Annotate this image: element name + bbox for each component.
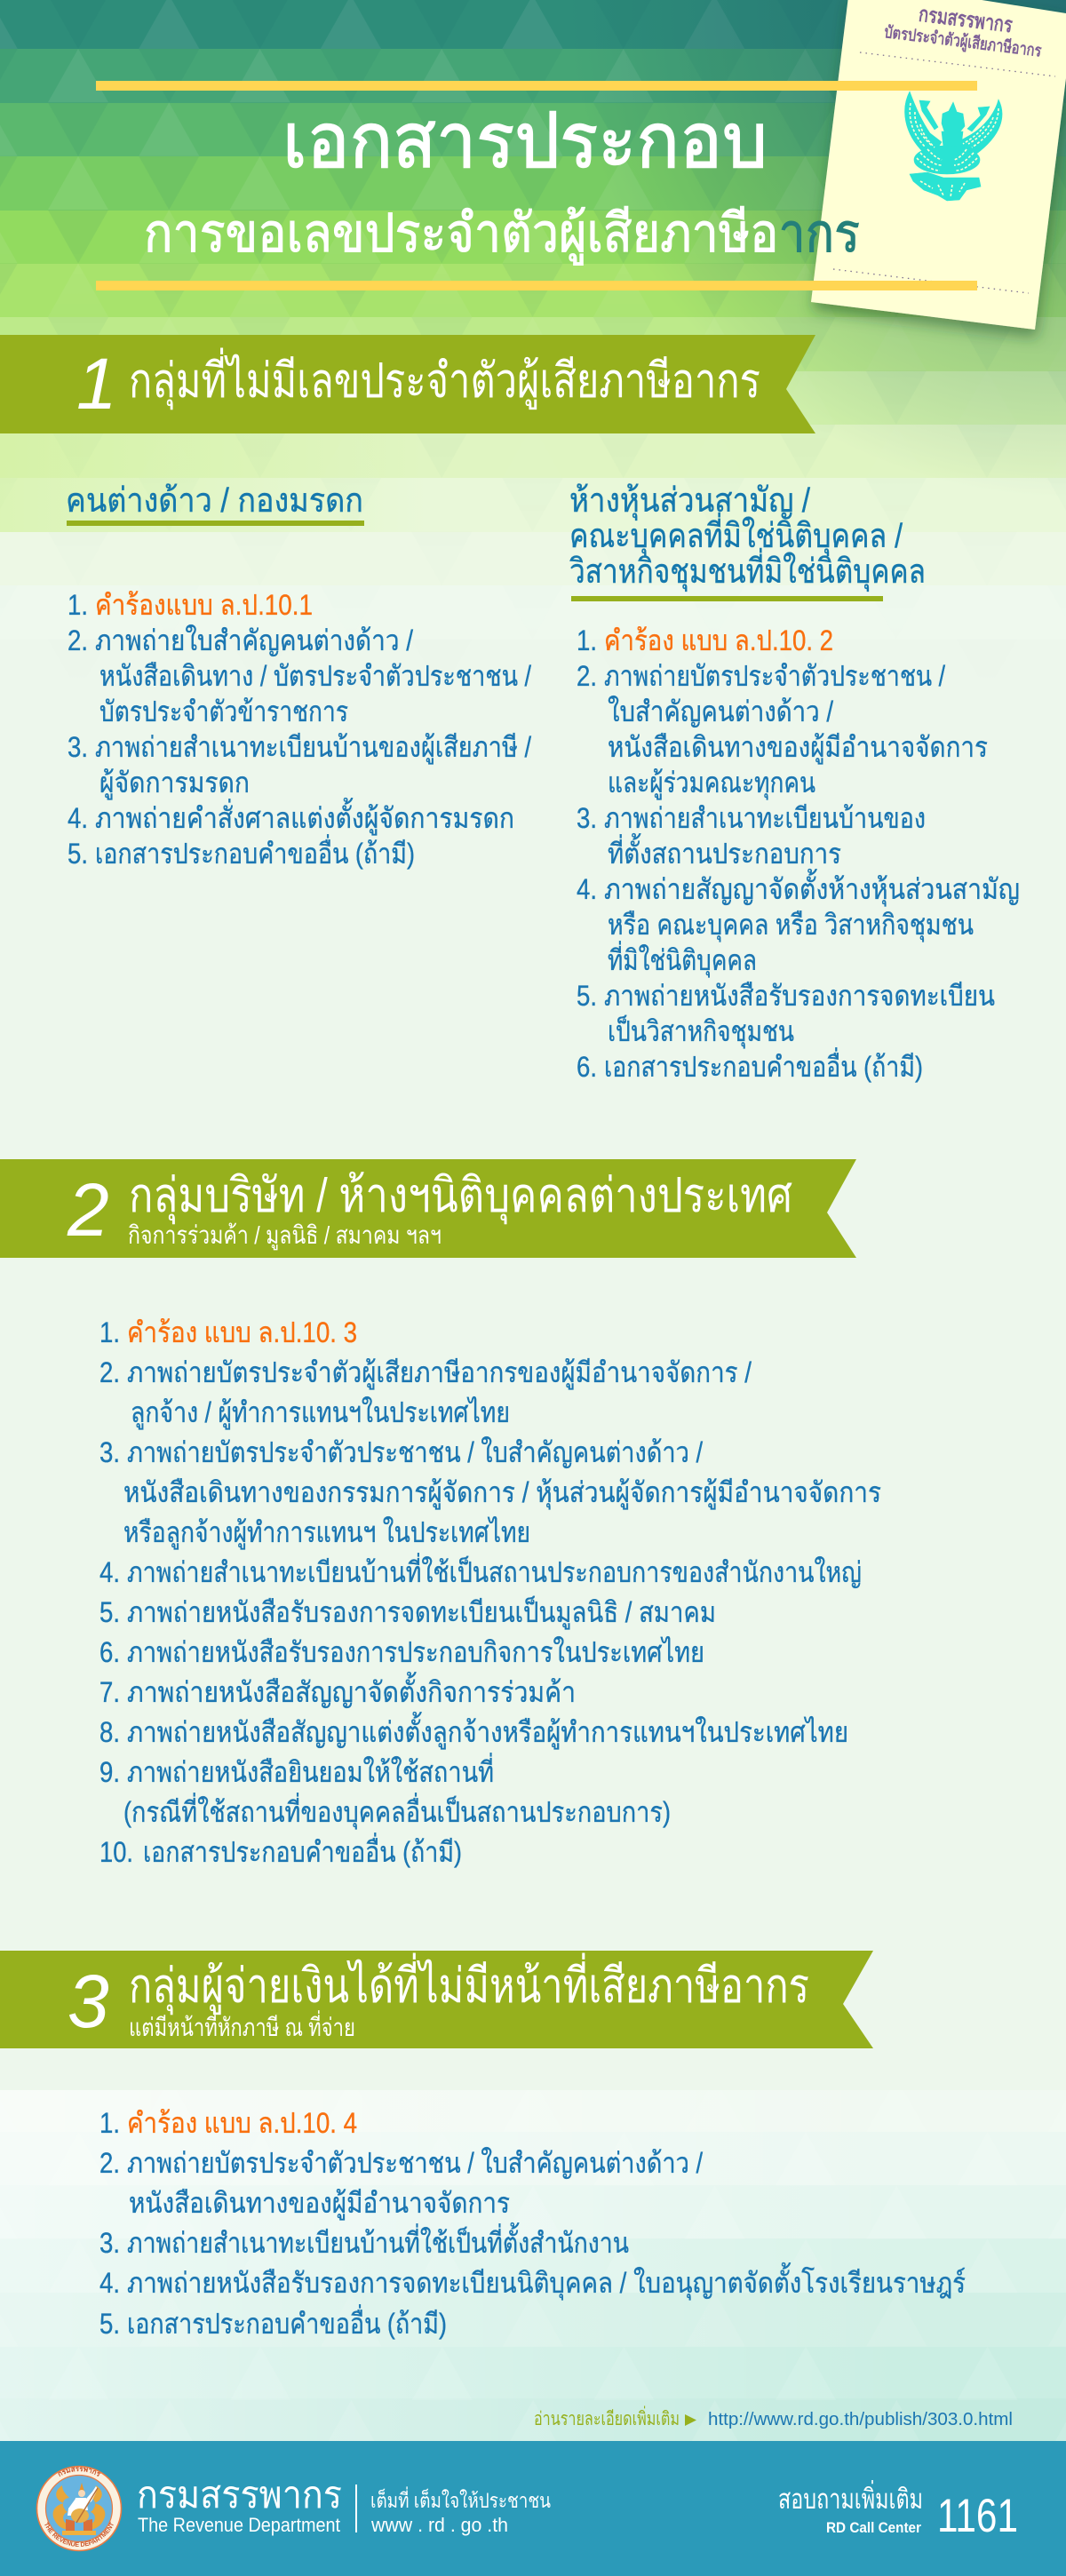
- panel: section 2 document list: ลูกจ้าง / ผู้ทำการแทนฯในประเทศไทย: [131, 1396, 510, 1430]
- document list: 4.: [68, 802, 88, 834]
- panel: section 2 document list: ภาพถ่ายบัตรประจำตัวประชาชน / ใบสำคัญคนต่างด้าว /: [127, 1436, 703, 1468]
- panel: section 2 document list: 2.: [99, 1356, 120, 1388]
- panel: section 3 document list: 4.: [99, 2267, 120, 2299]
- heading: [569, 482, 926, 601]
- panel: section 2 document list: เอกสารประกอบคำขออื่น (ถ้ามี): [143, 1833, 462, 1868]
- heading: ห้างหุ้นส่วนสามัญ /: [569, 482, 810, 521]
- ribbon: section 1: กลุ่มที่ไม่มีเลขประจำตัวผู้เสียภาษีอากร: [129, 347, 760, 410]
- document list: หนังสือเดินทาง / บัตรประจำตัวประชาชน /: [99, 660, 531, 692]
- panel: section 2 document list: 3.: [99, 1436, 120, 1468]
- panel: section 2 document list: ภาพถ่ายหนังสือยินยอมให้ใช้สถานที่: [127, 1753, 494, 1788]
- document list: และผู้ร่วมคณะทุกคน: [608, 767, 815, 800]
- document list: 5.: [577, 980, 597, 1012]
- panel: section 2 document list: หนังสือเดินทางของกรรมการผู้จัดการ / หุ้นส่วนผู้จัดการผู้มีอำนาจจัดการ: [123, 1476, 881, 1510]
- call center: RD Call Center: [826, 2519, 921, 2536]
- panel: section 2 document list: 5.: [99, 1596, 120, 1628]
- ribbon: section 3: แต่มีหน้าที่หักภาษี ณ ที่จ่าย: [129, 2010, 355, 2041]
- panel: foreigners and estates: [66, 482, 531, 870]
- document list: หนังสือเดินทางของผู้มีอำนาจจัดการ: [608, 731, 988, 765]
- panel: section 3 document list: 3.: [99, 2227, 120, 2259]
- slogan and website: [370, 2486, 551, 2536]
- card heading: กรมสรรพากร: [918, 4, 1014, 37]
- slogan and website: เต็มที่ เต็มใจให้ประชาชน: [370, 2486, 551, 2512]
- document list: เป็นวิสาหกิจชุมชน: [608, 1014, 794, 1049]
- icon: revenue department seal: กรมสรรพากร: [59, 2467, 101, 2477]
- ribbon: section 1: [0, 335, 815, 433]
- document list: 1.: [577, 624, 597, 656]
- panel: section 3 document list: 5.: [99, 2308, 120, 2340]
- panel: section 2 document list: ภาพถ่ายหนังสือรับรองการจดทะเบียนเป็นมูลนิธิ / สมาคม: [127, 1595, 716, 1630]
- read more link: http://www.rd.go.th/publish/303.0.html: [708, 2410, 1013, 2429]
- document list: [68, 589, 531, 870]
- panel: section 3 document list: ภาพถ่ายสำเนาทะเบียนบ้านที่ใช้เป็นที่ตั้งสำนักงาน: [127, 2222, 629, 2259]
- title: [96, 81, 977, 290]
- call center: 1161: [937, 2490, 1018, 2542]
- heading: วิสาหกิจชุมชนที่มิใช่นิติบุคคล: [569, 548, 926, 592]
- document list: เอกสารประกอบคำขออื่น (ถ้ามี): [604, 1047, 923, 1083]
- subheading: การขอเลขประจำตัวผู้เสียภาษีอากร: [144, 203, 860, 266]
- document list: ภาพถ่ายใบสำคัญคนต่างด้าว /: [95, 624, 413, 656]
- ribbon: section 1: 1: [76, 344, 117, 425]
- panel: section 3 document list: 1.: [99, 2107, 120, 2139]
- document list: ภาพถ่ายหนังสือรับรองการจดทะเบียน: [604, 980, 995, 1012]
- main heading: เอกสารประกอบ: [282, 99, 768, 184]
- panel: section 2 document list: ภาพถ่ายหนังสือรับรองการประกอบกิจการในประเทศไทย: [127, 1636, 704, 1668]
- ribbon: section 3: 3: [68, 1960, 109, 2043]
- panel: section 2 document list: 8.: [99, 1716, 120, 1748]
- panel: section 2 document list: (กรณีที่ใช้สถานที่ของบุคคลอื่นเป็นสถานประกอบการ): [123, 1793, 671, 1830]
- icon: garuda emblem: [905, 91, 1002, 201]
- icon: revenue department seal: THE REVENUE DEPARTMENT: [44, 2522, 114, 2547]
- panel: section 2 document list: ภาพถ่ายหนังสือสัญญาจัดตั้งกิจการร่วมค้า: [127, 1672, 576, 1708]
- document list: 5.: [68, 838, 88, 870]
- panel: section 2 document list: ภาพถ่ายบัตรประจำตัวผู้เสียภาษีอากรของผู้มีอำนาจจัดการ /: [127, 1356, 752, 1390]
- organisation name: [137, 2474, 342, 2536]
- document list: ผู้จัดการมรดก: [99, 767, 250, 800]
- document list: ใบสำคัญคนต่างด้าว /: [608, 696, 833, 727]
- document list: คำร้อง แบบ ล.ป.10. 2: [604, 624, 833, 656]
- document list: หรือ คณะบุคคล หรือ วิสาหกิจชุมชน: [608, 909, 974, 942]
- card heading: [883, 0, 1046, 62]
- document list: ภาพถ่ายสัญญาจัดตั้งห้างหุ้นส่วนสามัญ: [604, 869, 1020, 907]
- read more link: อ่านรายละเอียดเพิ่มเติม: [534, 2405, 680, 2429]
- panel: section 2 document list: 6.: [99, 1636, 120, 1668]
- document list: บัตรประจำตัวข้าราชการ: [99, 696, 348, 727]
- document list: ที่ตั้งสถานประกอบการ: [608, 833, 841, 870]
- ribbon: section 2: กิจการร่วมค้า / มูลนิธิ / สมาคม ฯลฯ: [128, 1221, 442, 1251]
- heading: คณะบุคคลที่มิใช่นิติบุคคล /: [569, 513, 903, 556]
- ribbon: section 3: กลุ่มผู้จ่ายเงินได้ที่ไม่มีหน้าที่เสียภาษีอากร: [129, 1952, 809, 2015]
- ribbon: section 3: [0, 1951, 873, 2048]
- panel: section 3 document list: คำร้อง แบบ ล.ป.10. 4: [127, 2107, 357, 2139]
- document list: 2.: [577, 660, 597, 692]
- panel: section 3 document list: หนังสือเดินทางของผู้มีอำนาจจัดการ: [129, 2187, 510, 2221]
- panel: section 2 document list: 4.: [99, 1556, 120, 1588]
- panel: section 3 document list: 2.: [99, 2147, 120, 2179]
- organisation name: กรมสรรพากร: [137, 2474, 342, 2516]
- call center: [778, 2480, 1018, 2542]
- document list: ภาพถ่ายสำเนาทะเบียนบ้านของ: [604, 802, 926, 834]
- organisation name: The Revenue Department: [138, 2514, 340, 2536]
- panel: section 2 document list: 9.: [99, 1756, 120, 1788]
- document list: คำร้องแบบ ล.ป.10.1: [95, 589, 313, 621]
- document card: [811, 0, 1066, 330]
- panel: section 2 document list: ภาพถ่ายหนังสือสัญญาแต่งตั้งลูกจ้างหรือผู้ทำการแทนฯในประเทศไทย: [127, 1712, 848, 1750]
- document list: 2.: [68, 624, 88, 656]
- ribbon: section 2: กลุ่มบริษัท / ห้างฯนิติบุคคลต่างประเทศ: [129, 1169, 792, 1225]
- panel: partnerships and community enterprises: [569, 482, 1020, 1083]
- call center: สอบถามเพิ่มเติม: [778, 2480, 923, 2515]
- panel: section 2 document list: 10.: [99, 1836, 133, 1868]
- document list: [577, 624, 1020, 1083]
- document list: เอกสารประกอบคำขออื่น (ถ้ามี): [95, 834, 415, 870]
- document list: 4.: [577, 873, 597, 905]
- panel: section 3 document list: ภาพถ่ายบัตรประจำตัวประชาชน / ใบสำคัญคนต่างด้าว /: [127, 2147, 703, 2179]
- panel: section 2 document list: 1.: [99, 1316, 120, 1348]
- panel: section 2 document list: หรือลูกจ้างผู้ทำการแทนฯ ในประเทศไทย: [123, 1516, 530, 1550]
- document list: ภาพถ่ายสำเนาทะเบียนบ้านของผู้เสียภาษี /: [95, 731, 531, 765]
- panel: section 3 document list: เอกสารประกอบคำขออื่น (ถ้ามี): [127, 2304, 447, 2340]
- document list: ที่มิใช่นิติบุคคล: [608, 941, 757, 978]
- document list: 3.: [577, 802, 597, 834]
- ribbon: section 2: 2: [67, 1168, 109, 1252]
- read more link: [534, 2405, 1013, 2429]
- icon: arrow: [685, 2414, 696, 2426]
- document list: 3.: [68, 731, 88, 763]
- footer: [0, 2441, 1066, 2576]
- panel: section 2 document list: คำร้อง แบบ ล.ป.10. 3: [127, 1316, 357, 1348]
- panel: section 3 document list: [99, 2107, 966, 2340]
- document list: ภาพถ่ายคำสั่งศาลแต่งตั้งผู้จัดการมรดก: [95, 798, 514, 836]
- panel: section 2 document list: ภาพถ่ายสำเนาทะเบียนบ้านที่ใช้เป็นสถานประกอบการของสำนักงานใหญ่: [127, 1553, 862, 1588]
- heading: คนต่างด้าว / กองมรดก: [66, 482, 363, 520]
- document list: 6.: [577, 1051, 597, 1083]
- ribbon: section 2: [0, 1159, 856, 1258]
- document list: 1.: [68, 589, 88, 621]
- panel: section 2 document list: 7.: [99, 1676, 120, 1708]
- icon: revenue department seal: [36, 2466, 123, 2551]
- panel: section 2 document list: [99, 1316, 881, 1868]
- document list: ภาพถ่ายบัตรประจำตัวประชาชน /: [604, 660, 945, 692]
- slogan and website: www . rd . go .th: [370, 2514, 508, 2536]
